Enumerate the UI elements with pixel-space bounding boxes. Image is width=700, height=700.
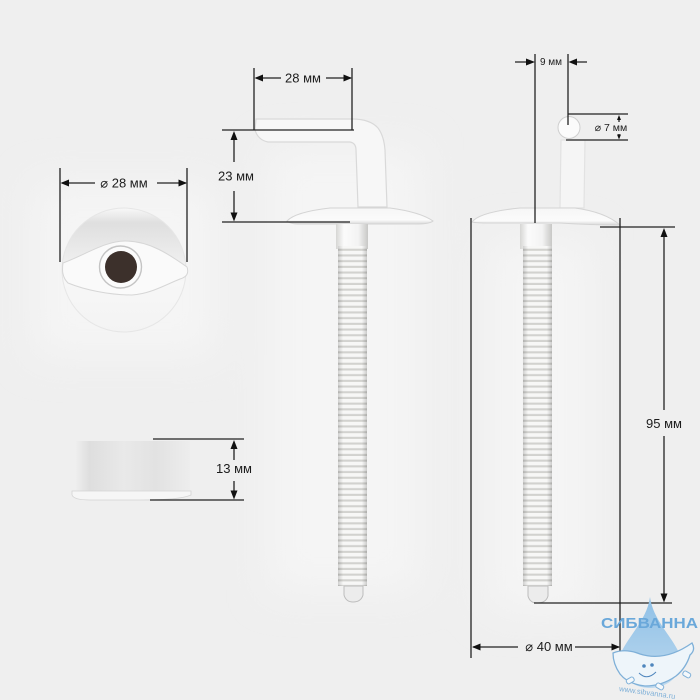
nut ring [100,246,142,288]
hook bracket [255,119,387,207]
dimension: post diameter: ⌀ 7 мм [595,122,627,134]
threaded shaft [338,246,367,586]
bolt tip [528,586,548,603]
dimension: bolt length: 95 мм [646,416,682,431]
dimension: hook width: 28 мм [285,70,321,86]
logo face [639,663,656,677]
panel: nut side view [72,439,252,500]
dimension: hook width [254,68,352,130]
flange [472,208,620,225]
dimension: flange diameter [471,218,620,660]
post knob [558,116,580,138]
nut wing [63,241,188,295]
nut disc [62,208,186,332]
panel: round nut top view [60,168,188,332]
dimension: nut height: 13 мм [216,461,252,476]
panel: L-hook bolt [218,68,433,602]
dimension: bolt length [534,227,682,603]
dimension: hook height [218,130,354,222]
nut body [76,441,190,491]
dimension: post offset [515,54,587,223]
shaft neck [520,224,552,249]
flange [287,208,433,224]
logo name: СИБВАННА [601,615,698,632]
dimension: post diameter [566,114,628,140]
dimension: flange diameter: ⌀ 40 мм [525,639,573,654]
dimension: nut height [150,439,252,500]
logo bathtub [613,643,694,686]
dimension: nut diameter: ⌀ 28 мм [100,176,148,190]
nut base [72,491,191,500]
dimension: post offset: 9 мм [540,57,562,68]
threaded shaft [523,246,552,586]
dimension: nut diameter [60,168,187,262]
bolt tip [344,586,363,602]
post [560,140,585,208]
logo: Sibvanna [601,597,698,700]
dimension: hook height: 23 мм [218,168,254,184]
nut hole [105,251,137,283]
logo drop [619,597,681,688]
shaft neck [336,224,368,249]
logo feet [626,670,691,691]
panel: straight-post bolt [471,54,682,660]
